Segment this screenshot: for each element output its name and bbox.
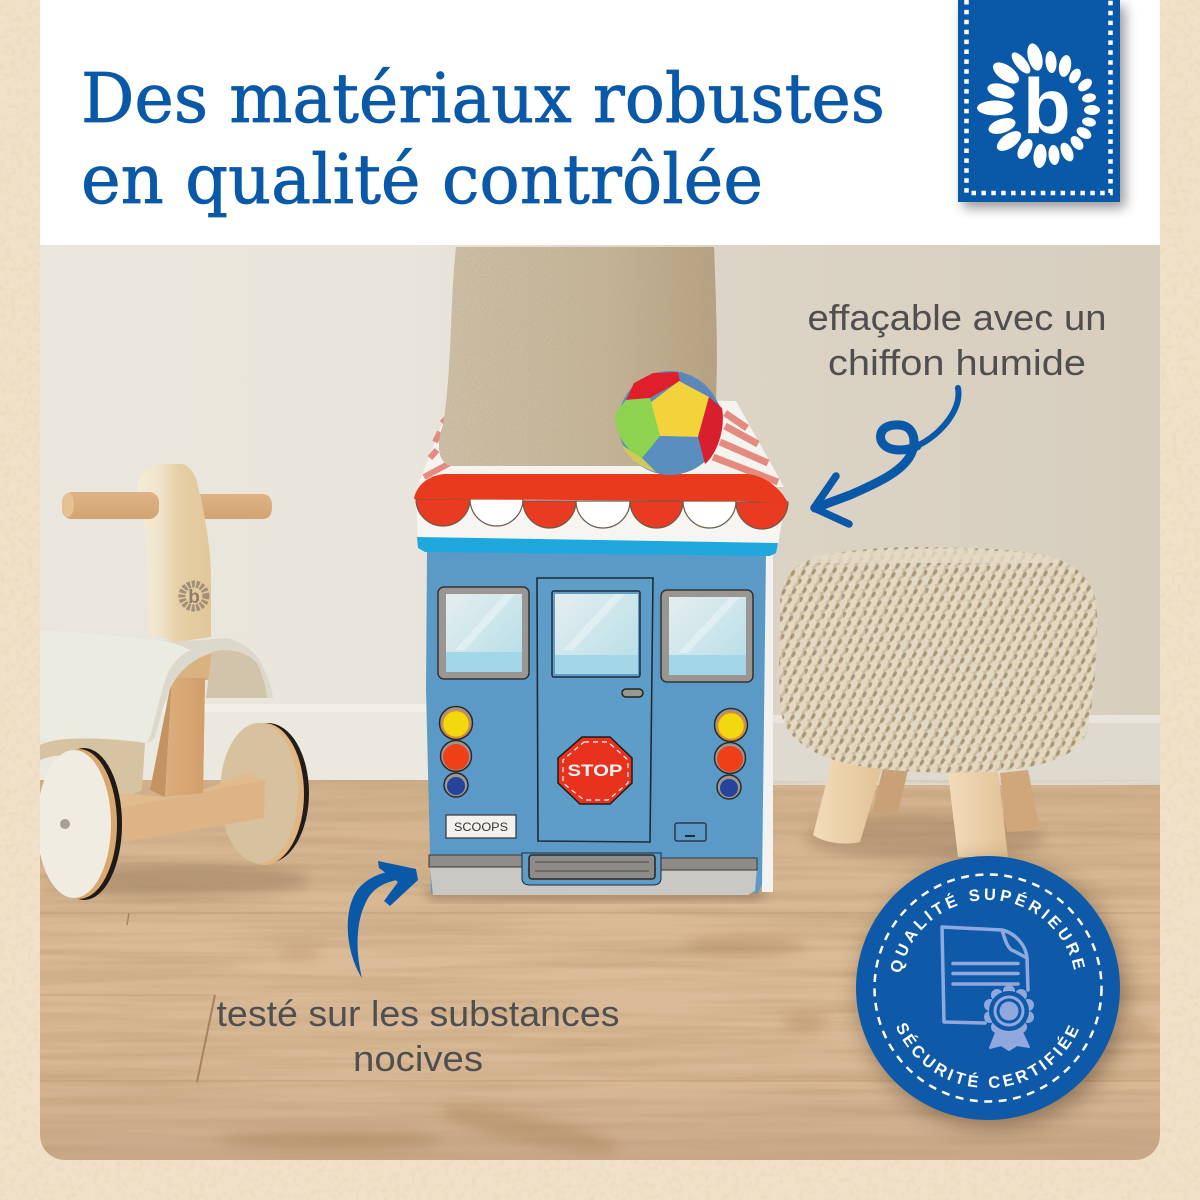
pouf stool: [779, 547, 1097, 860]
lid blue band: [417, 537, 778, 556]
white header panel: [40, 0, 1160, 246]
column neck: [176, 653, 212, 680]
quality badge: [847, 848, 1139, 1140]
ride-on toy: [37, 464, 310, 900]
right window: [661, 590, 753, 682]
wall: [40, 245, 1160, 715]
callout: wipeable: [808, 297, 1106, 383]
pouf cushion: [779, 547, 1097, 773]
handlebar left: [62, 492, 159, 519]
logo letter: b: [1023, 62, 1071, 150]
right wheel: [220, 723, 309, 865]
photo scene: [40, 245, 1160, 1160]
seat: [80, 638, 273, 742]
icon: flower: [977, 42, 1100, 169]
steering column: [138, 464, 211, 642]
title: en qualité contrôlée: [81, 141, 763, 220]
wooden floor: [40, 780, 1160, 1162]
icon: seal: [984, 985, 1034, 1037]
toy logo: b: [188, 587, 200, 608]
toy ball: [615, 371, 723, 475]
scallops: [416, 499, 788, 529]
pouf legs: [813, 760, 1040, 857]
badge text top: QUALITÉ SUPÉRIEURE: [890, 888, 1085, 972]
logo tag: [958, 0, 1125, 208]
icon: certificate: [942, 927, 1034, 1050]
license plate: [446, 815, 516, 838]
box body: [426, 552, 766, 893]
left wheel: [37, 748, 122, 900]
lid top stripes: [416, 398, 784, 490]
box side: [762, 552, 773, 892]
rear under-seat: [40, 738, 145, 800]
box shadow: [428, 888, 763, 900]
title: [81, 60, 885, 220]
stop sign: STOP: [568, 762, 622, 780]
toy logo: [182, 584, 206, 608]
badge text bottom: SÉCURITÉ CERTIFIÉE: [896, 1023, 1079, 1088]
license plate: SCOOPS: [454, 822, 508, 834]
right lights: [714, 708, 748, 799]
arrow: wipeable: [814, 388, 958, 524]
icon: seal ribbons: [990, 1030, 1029, 1050]
callout: tested: nocives: [353, 1038, 483, 1079]
callout: tested: [216, 993, 620, 1079]
lid front: [416, 497, 786, 545]
wood knots: [220, 936, 1155, 1162]
post: [150, 678, 205, 797]
pouf shadow: [805, 816, 1045, 860]
handlebar right: [200, 494, 272, 519]
callout: wipeable: effaçable avec un: [808, 297, 1106, 338]
burlap bag: [436, 247, 720, 467]
door: [537, 578, 653, 842]
horizontal bar: [120, 678, 265, 842]
red awning band: [414, 474, 788, 503]
pouf top highlight: [808, 549, 1060, 563]
left window: [438, 587, 529, 679]
callout: tested: testé sur les substances: [216, 993, 620, 1034]
storage box bus: [414, 474, 788, 900]
stop sign: [558, 737, 632, 804]
callout: wipeable: chiffon humide: [828, 342, 1086, 383]
toy shadow: [50, 864, 310, 896]
left lights: [440, 706, 472, 797]
bumper: [429, 853, 757, 895]
arrow: tested: [348, 861, 418, 978]
baseboards: [162, 704, 1160, 785]
small hatch: [675, 823, 706, 841]
title: Des matériaux robustes: [81, 60, 885, 139]
